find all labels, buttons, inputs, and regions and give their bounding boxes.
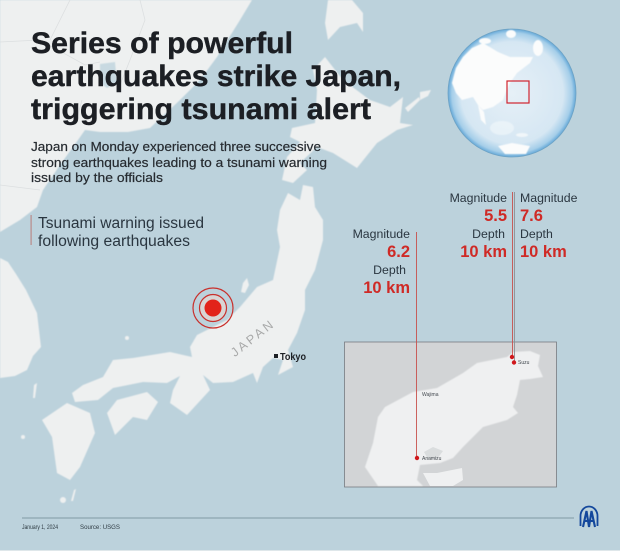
footer credits: Source: USGS — [80, 524, 121, 531]
icon: agency logo — [580, 506, 598, 527]
inset place labels: Suzu — [518, 360, 530, 366]
quake data: magnitude 6.2: Depth — [373, 263, 406, 277]
quake data: magnitude 6.2: 6.2 — [387, 243, 410, 261]
globe sphere — [448, 29, 576, 157]
quake data: magnitude 5.5: Depth — [472, 227, 505, 241]
footer rule — [22, 517, 574, 519]
inset place labels: Anamizu — [422, 456, 442, 462]
quake data: magnitude 5.5: 5.5 — [484, 207, 507, 225]
land: Hokkaido — [282, 57, 413, 183]
bottom edge strip — [0, 550, 620, 551]
land: Asian mainland — [0, 0, 252, 232]
footer credits — [22, 524, 121, 531]
land: Shikoku — [107, 392, 158, 435]
subtitle text: strong earthquakes leading to a tsunami warning — [31, 155, 327, 170]
callout: tsunami warning: following earthquakes — [38, 233, 190, 250]
land: Korea — [0, 258, 41, 378]
land: Honshu — [72, 185, 323, 415]
inset place labels — [422, 360, 530, 462]
quake data: magnitude 5.5: Magnitude — [450, 191, 507, 205]
leader lines and quake points — [415, 192, 516, 460]
inset land: lower island — [423, 468, 463, 486]
city label: Tokyo: Tokyo — [280, 352, 306, 363]
inset land: Noto peninsula — [365, 351, 543, 486]
quake data: magnitude 5.5 — [450, 191, 507, 261]
base map of land — [0, 0, 431, 503]
inset map — [344, 342, 556, 487]
land: Sakhalin — [325, 0, 363, 40]
title: Series of powerful — [31, 27, 293, 60]
epicentre marker — [193, 288, 233, 328]
quake data: magnitude 5.5: 10 km — [460, 243, 507, 261]
quake data: magnitude 6.2 — [353, 227, 410, 297]
callout: tsunami warning — [30, 215, 204, 250]
land detail lines — [0, 0, 145, 190]
inset background — [344, 342, 556, 487]
inset bay — [424, 447, 443, 459]
quake data: magnitude 7.6: 10 km — [520, 243, 567, 261]
subtitle text: Japan on Monday experienced three successive — [31, 139, 321, 154]
inset place labels: Wajima — [422, 392, 439, 398]
quake data: magnitude 7.6: Magnitude — [520, 191, 578, 205]
lake on mainland — [100, 62, 117, 88]
quake data: magnitude 7.6: 7.6 — [520, 207, 543, 225]
quake data: magnitude 6.2: 10 km — [363, 279, 410, 297]
callout: tsunami warning: Tsunami warning issued — [38, 215, 204, 232]
locator globe — [448, 29, 576, 157]
country label: Japan: JAPAN — [228, 316, 278, 360]
globe locator box — [507, 81, 529, 103]
globe land — [452, 30, 543, 154]
land: small islands — [21, 90, 431, 503]
title — [31, 27, 401, 126]
quake data: magnitude 7.6: Depth — [520, 227, 553, 241]
quake data: magnitude 7.6 — [520, 191, 578, 261]
title: earthquakes strike Japan, — [31, 60, 401, 93]
quake data: magnitude 6.2: Magnitude — [353, 227, 410, 241]
subtitle text: issued by the officials — [31, 170, 164, 185]
title: triggering tsunami alert — [31, 93, 371, 126]
subtitle text — [31, 139, 327, 185]
footer credits: January 1, 2024 — [22, 524, 58, 531]
land: Kyushu — [42, 403, 95, 480]
